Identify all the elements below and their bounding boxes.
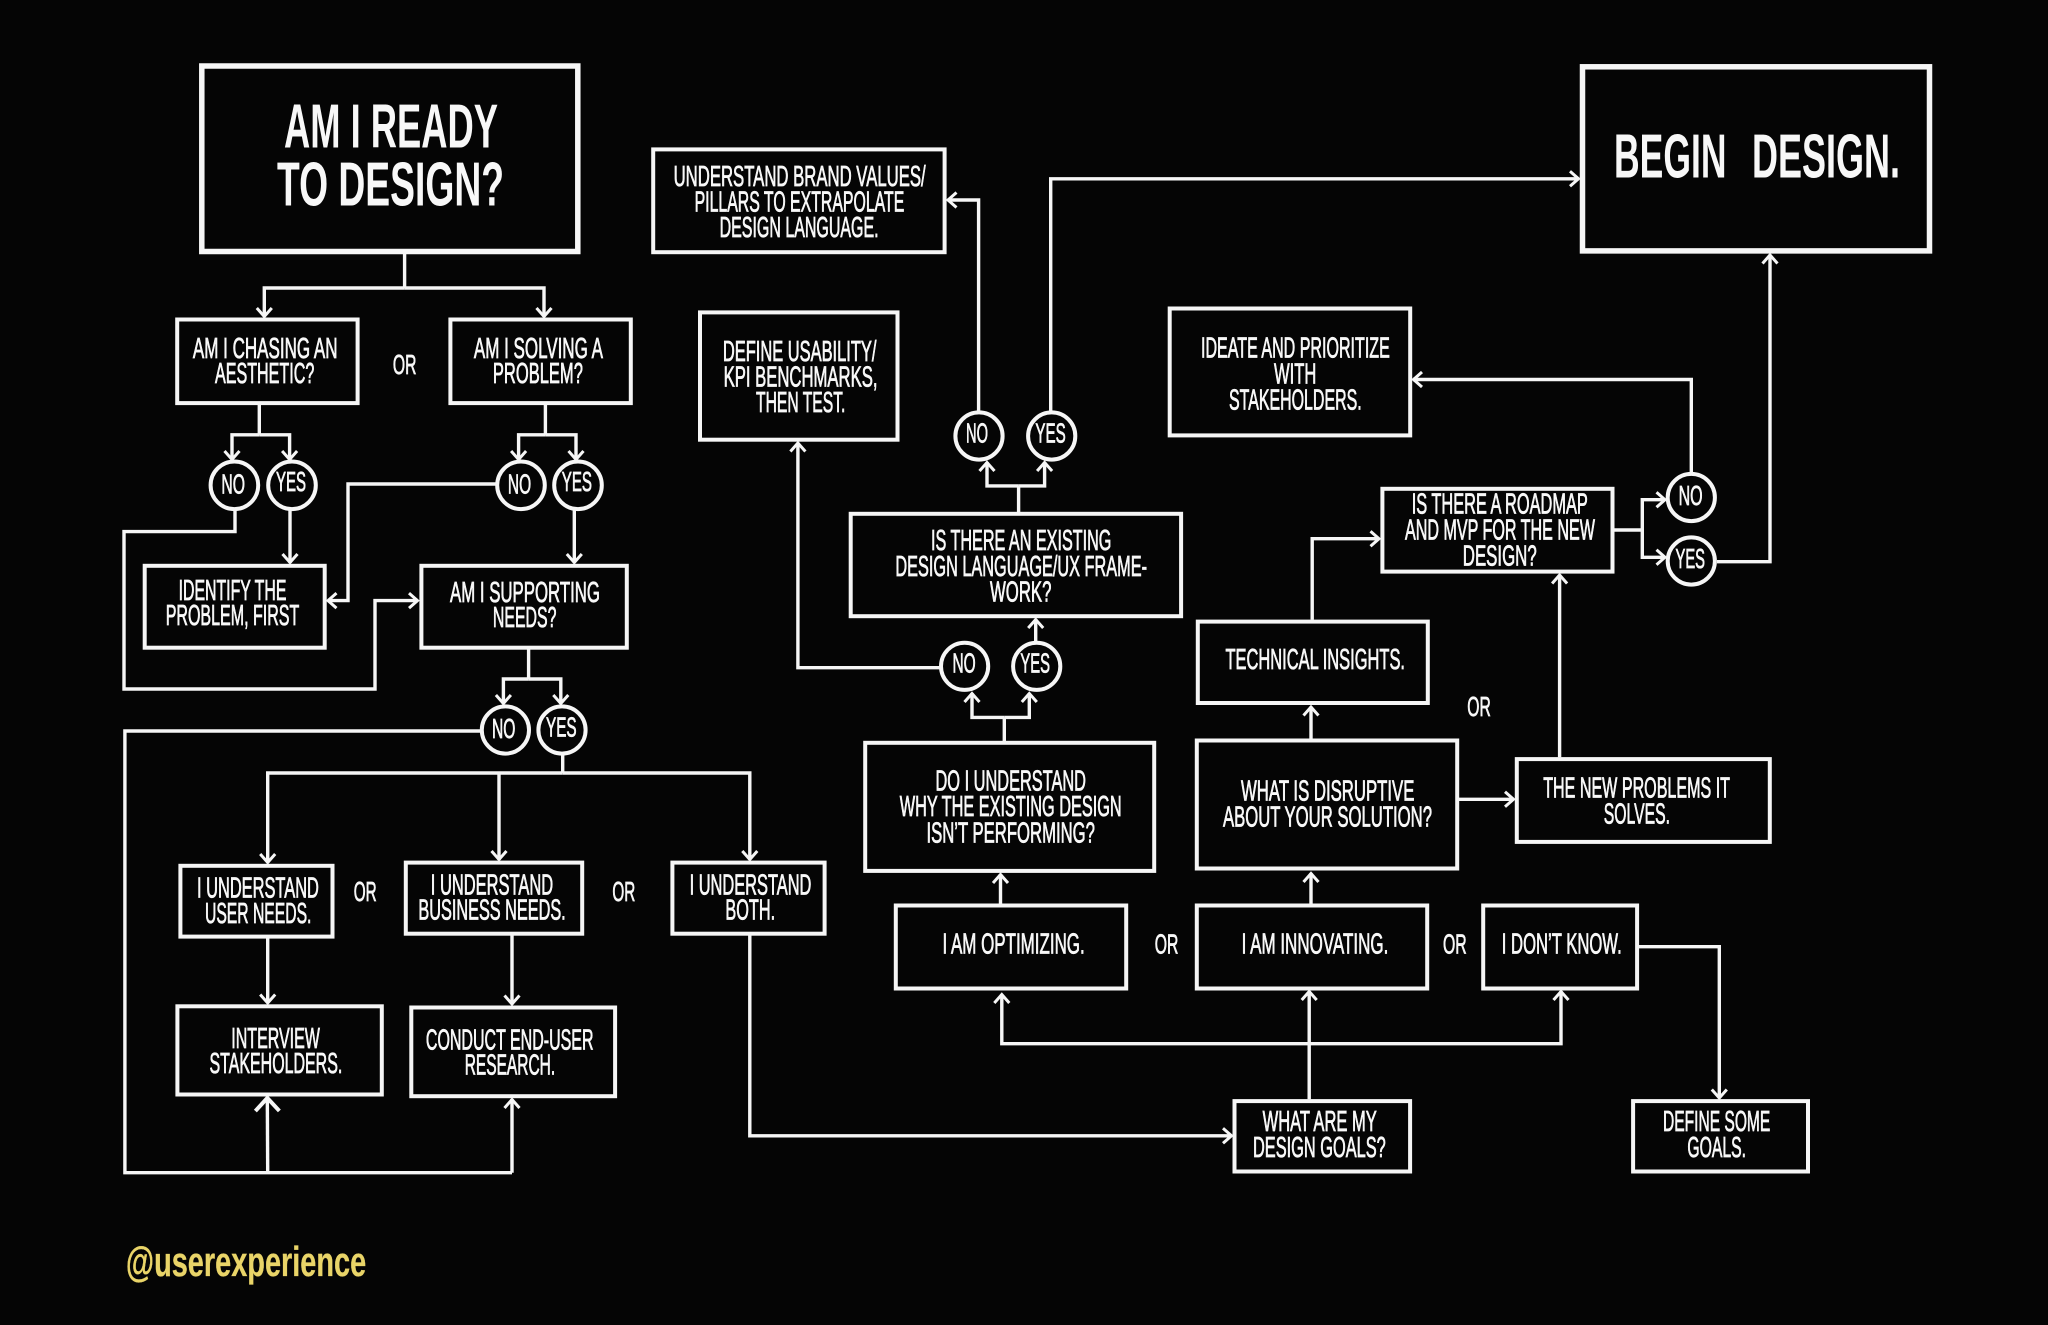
arrow: optimizing to understand bbox=[999, 874, 1002, 904]
arrow: no to brand values bbox=[948, 200, 979, 411]
box: what are my design goals: DESIGN GOALS? bbox=[1253, 1132, 1386, 1164]
box: I understand business needs bbox=[406, 863, 582, 934]
box: is there a roadmap and mvp bbox=[1382, 488, 1612, 573]
box: am I supporting needs bbox=[421, 566, 627, 648]
arrow: roadmap to no and yes bbox=[1614, 500, 1666, 557]
node: yes (roadmap) bbox=[1668, 537, 1715, 585]
arrow: problem to no and yes bbox=[519, 405, 576, 460]
box: understand brand values: DESIGN LANGUAGE. bbox=[720, 212, 879, 244]
handle: @userexperience: @userexperience bbox=[126, 1238, 366, 1285]
box: I understand user needs: USER NEEDS. bbox=[205, 898, 311, 930]
box: I understand both: I UNDERSTAND bbox=[690, 869, 811, 901]
box: I understand both: BOTH. bbox=[725, 895, 775, 927]
box: understand brand values bbox=[653, 149, 945, 252]
or label: OR bbox=[612, 876, 635, 907]
arrow: problem no to identify the problem bbox=[328, 484, 496, 601]
node: yes (existing language): YES bbox=[1035, 418, 1066, 449]
box: am I supporting needs: NEEDS? bbox=[493, 602, 556, 634]
arrow: aesthetic to no and yes bbox=[232, 405, 290, 460]
node: yes (needs): YES bbox=[546, 711, 577, 742]
arrow: no to ideate bbox=[1413, 380, 1691, 473]
box: am I solving a problem: AM I SOLVING A bbox=[474, 333, 603, 365]
box: interview stakeholders: INTERVIEW bbox=[231, 1023, 320, 1055]
box: is there an existing design language: DESIGN LANGUAGE/UX FRAME- bbox=[895, 551, 1147, 583]
arrow: needs no loops to interview and research bbox=[125, 731, 512, 1173]
arrow: technical insights to roadmap bbox=[1312, 539, 1380, 620]
node: no (needs) bbox=[482, 706, 529, 754]
box: am I solving a problem bbox=[450, 320, 631, 403]
box: am I chasing an aesthetic: AM I CHASING AN bbox=[193, 333, 338, 365]
arrow: yes to begin design bbox=[1717, 254, 1770, 562]
box: I understand user needs: I UNDERSTAND bbox=[197, 873, 319, 905]
node: no (existing language) bbox=[955, 412, 1003, 460]
node: yes (understand): YES bbox=[1020, 648, 1050, 679]
box: am I chasing an aesthetic: AESTHETIC? bbox=[215, 358, 314, 390]
box: am I supporting needs: AM I SUPPORTING bbox=[450, 577, 600, 609]
box: am I solving a problem: PROBLEM? bbox=[493, 358, 583, 390]
node: no (aesthetic) bbox=[211, 462, 258, 509]
box: understand brand values: UNDERSTAND BRAND VALUES/ bbox=[674, 161, 926, 193]
node: yes (needs) bbox=[538, 706, 586, 754]
box: ideate and prioritize: IDEATE AND PRIORITIZE bbox=[1201, 332, 1390, 364]
or label: OR bbox=[354, 876, 377, 907]
title box: Am I ready to design?: TO DESIGN? bbox=[277, 150, 504, 219]
box: what is disruptive: WHAT IS DISRUPTIVE bbox=[1241, 776, 1414, 808]
box: the new problems it solves bbox=[1517, 759, 1770, 842]
box: technical insights bbox=[1198, 622, 1428, 703]
arrow: no to define usability bbox=[798, 442, 940, 668]
arrow: disruptive to technical insights bbox=[1309, 706, 1313, 739]
box: what are my design goals bbox=[1234, 1101, 1410, 1172]
arrow: don't know to define some goals bbox=[1639, 947, 1719, 1098]
or label: OR bbox=[1443, 928, 1467, 959]
box: define some goals bbox=[1633, 1101, 1808, 1172]
box: am I chasing an aesthetic bbox=[177, 320, 358, 403]
node: yes (understand) bbox=[1013, 643, 1060, 690]
box: define usability kpi benchmarks: DEFINE USABILITY/ bbox=[723, 336, 876, 368]
box: the new problems it solves: SOLVES. bbox=[1604, 798, 1670, 830]
title box: Am I ready to design? bbox=[202, 66, 578, 252]
box: identify the problem first: IDENTIFY THE bbox=[179, 575, 286, 607]
box: what are my design goals: WHAT ARE MY bbox=[1263, 1106, 1377, 1138]
arrow: both to design goals bbox=[750, 936, 1232, 1136]
box: is there an existing design language: WORK? bbox=[990, 576, 1051, 608]
arrow: understand to no and yes bbox=[972, 693, 1029, 743]
box: do I understand why existing design is not performing: ISN’T PERFORMING? bbox=[926, 817, 1095, 849]
node: no (roadmap): NO bbox=[1679, 480, 1703, 511]
box: I am optimizing bbox=[896, 906, 1126, 988]
box: ideate and prioritize: STAKEHOLDERS. bbox=[1229, 384, 1362, 416]
box: I understand both bbox=[672, 863, 825, 934]
node: no (problem) bbox=[497, 462, 545, 509]
box: ideate and prioritize bbox=[1170, 308, 1410, 435]
box: identify the problem first bbox=[145, 566, 325, 648]
box: is there a roadmap and mvp: DESIGN? bbox=[1463, 541, 1537, 573]
arrow: problem yes to supporting needs bbox=[573, 510, 576, 563]
box: is there a roadmap and mvp: IS THERE A ROADMAP bbox=[1412, 488, 1588, 520]
node: no (understand) bbox=[941, 643, 988, 690]
box: the new problems it solves: THE NEW PROBLEMS IT bbox=[1543, 772, 1730, 804]
box: begin design: DESIGN. bbox=[1752, 122, 1900, 192]
node: yes (problem) bbox=[554, 462, 602, 509]
box: is there an existing design language bbox=[851, 514, 1181, 616]
title box: Am I ready to design?: AM I READY bbox=[284, 92, 498, 161]
node: no (roadmap) bbox=[1668, 474, 1715, 521]
arrow: aesthetic no loops to supporting needs bbox=[124, 510, 418, 689]
arrow: needs yes to three understanding boxes bbox=[268, 755, 750, 863]
arrow: new problems to roadmap bbox=[1558, 574, 1561, 757]
box: conduct end-user research: RESEARCH. bbox=[465, 1050, 555, 1082]
box: interview stakeholders bbox=[177, 1006, 382, 1094]
arrow: business needs to research bbox=[510, 936, 514, 1004]
node: no (problem): NO bbox=[508, 469, 531, 500]
box: do I understand why existing design is not performing bbox=[865, 743, 1154, 871]
node: yes (aesthetic): YES bbox=[276, 466, 306, 497]
box: define usability kpi benchmarks: KPI BENCHMARKS, bbox=[724, 361, 878, 393]
arrow: supporting needs to no and yes bbox=[503, 649, 561, 704]
node: yes (problem): YES bbox=[562, 466, 592, 497]
box: I understand business needs: BUSINESS NEEDS. bbox=[418, 895, 566, 927]
node: yes (aesthetic) bbox=[268, 462, 316, 509]
arrow: yes to existing language bbox=[1034, 619, 1037, 641]
node: yes (existing language) bbox=[1028, 412, 1075, 460]
box: is there a roadmap and mvp: AND MVP FOR THE NEW bbox=[1405, 515, 1595, 547]
arrow: user needs to interview bbox=[266, 938, 269, 1004]
box: I don't know bbox=[1483, 906, 1637, 988]
box: I don't know: I DON’T KNOW. bbox=[1502, 928, 1622, 960]
arrow: disruptive to new problems bbox=[1459, 798, 1514, 801]
box: I understand business needs: I UNDERSTAND bbox=[431, 869, 553, 901]
node: no (understand): NO bbox=[952, 648, 976, 679]
arrow: design goals to three intents bbox=[1002, 991, 1561, 1099]
box: what is disruptive: ABOUT YOUR SOLUTION? bbox=[1223, 802, 1432, 834]
arrow: title to aesthetic and problem bbox=[264, 254, 544, 317]
or label: OR bbox=[393, 349, 416, 380]
or label: OR bbox=[1155, 928, 1178, 959]
box: define usability kpi benchmarks: THEN TEST. bbox=[756, 387, 845, 419]
box: I am optimizing: I AM OPTIMIZING. bbox=[942, 928, 1085, 960]
box: do I understand why existing design is not performing: WHY THE EXISTING DESIGN bbox=[900, 791, 1122, 823]
box: conduct end-user research bbox=[411, 1008, 615, 1096]
box: I am innovating bbox=[1197, 906, 1427, 988]
box: interview stakeholders: STAKEHOLDERS. bbox=[210, 1048, 342, 1080]
node: no (needs): NO bbox=[492, 713, 515, 744]
box: begin design bbox=[1582, 67, 1930, 251]
box: ideate and prioritize: WITH bbox=[1274, 358, 1316, 390]
box: define some goals: DEFINE SOME bbox=[1663, 1106, 1770, 1138]
box: define some goals: GOALS. bbox=[1687, 1132, 1746, 1164]
arrow: aesthetic yes to identify the problem bbox=[288, 510, 292, 563]
box: understand brand values: PILLARS TO EXTRAPOLATE bbox=[695, 186, 904, 218]
box: define usability kpi benchmarks bbox=[700, 312, 898, 440]
arrow: existing language to no and yes bbox=[987, 462, 1045, 514]
box: conduct end-user research: CONDUCT END-USER bbox=[426, 1024, 594, 1056]
node: yes (roadmap): YES bbox=[1676, 543, 1705, 574]
or label: OR bbox=[1467, 691, 1491, 722]
arrow: innovating to disruptive bbox=[1309, 873, 1313, 904]
box: do I understand why existing design is not performing: DO I UNDERSTAND bbox=[936, 766, 1086, 798]
box: what is disruptive bbox=[1197, 740, 1457, 868]
node: no (existing language): NO bbox=[966, 418, 988, 449]
box: begin design: BEGIN bbox=[1614, 122, 1726, 192]
arrow: yes to begin design bbox=[1051, 179, 1579, 411]
box: technical insights: TECHNICAL INSIGHTS. bbox=[1226, 644, 1405, 676]
box: is there an existing design language: IS THERE AN EXISTING bbox=[931, 525, 1111, 557]
box: I understand user needs bbox=[180, 866, 332, 937]
box: I am innovating: I AM INNOVATING. bbox=[1242, 928, 1388, 960]
node: no (aesthetic): NO bbox=[221, 469, 245, 500]
box: identify the problem first: PROBLEM, FIRST bbox=[166, 600, 299, 632]
